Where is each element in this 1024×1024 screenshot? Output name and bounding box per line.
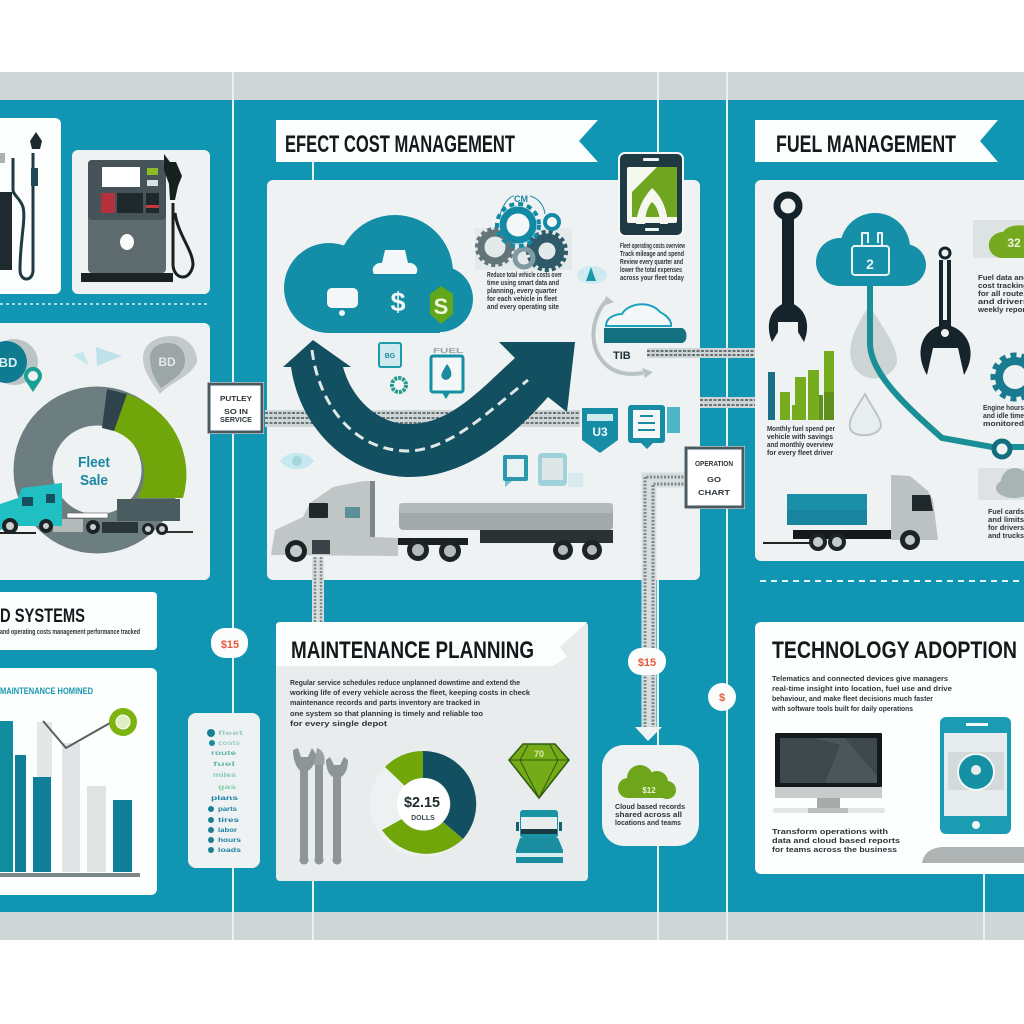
text block: tablet — [620, 243, 685, 282]
icon: tablet base — [922, 847, 1024, 863]
text block: Telematics and connected devices give managers — [772, 676, 948, 683]
text block: tablet: Review every quarter and — [620, 259, 683, 266]
icon: gears — [475, 194, 572, 270]
icon: green tag: 32 — [1007, 236, 1021, 250]
panel: systems heading: and operating costs management performance tracked — [0, 629, 140, 636]
panel: fuel pump — [72, 150, 210, 294]
panel: fleet donut — [0, 323, 210, 580]
text block: gears: and every operating site — [487, 304, 559, 311]
bar chart: and monthly overview — [767, 442, 833, 449]
panel: fuel management — [755, 180, 1024, 561]
icon: wrenches — [293, 748, 348, 865]
panel: legend column: costs — [218, 740, 240, 747]
connector: left tag — [207, 382, 264, 434]
connector: right tag with arrow — [635, 446, 745, 741]
icon: green tag — [973, 220, 1024, 258]
bar chart: Monthly fuel spend per — [767, 426, 835, 433]
connector: to fuel panel — [647, 348, 755, 408]
panel: legend column: fuel — [213, 761, 235, 768]
donut chart — [33, 389, 186, 534]
text block: right upper: and drivers — [978, 299, 1024, 306]
donut chart: DOLLS — [411, 815, 435, 822]
panel: effect cost management — [265, 153, 700, 580]
icon: small badges centre — [379, 343, 464, 399]
panel: legend column — [188, 713, 260, 868]
heading: effect cost management: EFECT COST MANAGEMENT — [285, 131, 515, 158]
icon: grey cloud tag: and limits — [988, 517, 1024, 524]
panel: legend column: labor — [218, 827, 238, 834]
icon: tablet — [619, 153, 683, 236]
text block: for every single depot — [290, 721, 388, 728]
text block: right upper — [977, 275, 1024, 314]
heading: MAINTENANCE PLANNING — [291, 637, 534, 664]
badge: connector dots — [211, 628, 736, 711]
donut chart — [370, 751, 476, 857]
teal background band — [0, 100, 1024, 912]
badge: connector dots: $15 — [638, 657, 656, 669]
text block: locations and teams — [615, 820, 681, 827]
icon: document badges — [503, 405, 680, 487]
icon: monitor — [773, 733, 885, 813]
icon: cloud with icons — [284, 215, 473, 333]
connector: left tag: SO IN — [224, 409, 248, 416]
icon: cloud: 2 — [866, 256, 874, 272]
text block: one system so that planning is timely and reliable too — [290, 711, 483, 718]
text block — [771, 676, 952, 713]
text block: right upper: Fuel data and — [978, 275, 1024, 282]
icon: eye — [280, 453, 314, 469]
donut chart: $2.15 — [404, 794, 440, 811]
icon: map pins — [0, 336, 197, 394]
icon: small badges centre: FUEL — [433, 348, 464, 355]
icon: green cloud: $12 — [642, 786, 656, 795]
panel: legend column: miles — [213, 772, 237, 779]
icon: grey cloud tag: and trucks — [988, 533, 1024, 540]
panel: legend column: plans — [211, 795, 239, 802]
panel: legend column: gas — [218, 784, 237, 791]
text block: below monitor: for teams across the business — [772, 847, 897, 854]
icon: document badges: U3 — [592, 425, 608, 439]
connector: down to maintenance — [312, 557, 324, 622]
icon: gem: 70 — [534, 749, 544, 759]
text block: Regular service schedules reduce unplanned downtime and extend the — [290, 680, 520, 687]
donut chart: Sale — [80, 472, 108, 489]
text block: right upper: cost tracking — [978, 283, 1024, 290]
icon: truck front — [516, 810, 563, 863]
panel: bar chart — [0, 668, 157, 895]
text block: below monitor: Transform operations with — [772, 829, 888, 836]
icon: drop and line — [850, 286, 1024, 457]
icon: long wrench — [769, 195, 807, 342]
icon: gear — [993, 355, 1024, 399]
text block: gears: planning, every quarter — [487, 288, 557, 295]
panel: bar chart: MAINTENANCE HOMINED — [0, 686, 93, 696]
icon: cloud with icons: S — [434, 294, 448, 319]
icon: grey cloud tag — [978, 468, 1024, 540]
icon: gem — [509, 744, 569, 798]
truck — [763, 475, 938, 551]
donut chart: Fleet — [78, 454, 110, 471]
icon: wrench right — [921, 248, 971, 375]
icon: cloud with icons: $ — [390, 287, 406, 317]
connector: left tag: SERVICE — [220, 417, 252, 424]
icon: grey cloud tag: Fuel cards — [988, 509, 1024, 516]
text block: gears: time using smart data and — [487, 280, 559, 287]
icon: grey cloud tag: for drivers — [988, 525, 1024, 532]
text block: shared across all — [615, 812, 682, 819]
text block: working life of every vehicle across the fleet, keeping costs in check — [289, 690, 530, 697]
bar chart: vehicle with savings — [767, 434, 833, 441]
badge: connector dots: $15 — [221, 639, 239, 651]
text block: with software tools built for daily operations — [771, 706, 913, 713]
text block — [289, 680, 530, 728]
bar chart — [767, 351, 835, 457]
icon: map pins: BD — [158, 355, 176, 369]
text block: real-time insight into location, fuel use and drive — [772, 686, 952, 693]
text block: behaviour, and make fleet decisions much faster — [772, 696, 933, 703]
text block — [615, 804, 685, 827]
connector: right tag with arrow: GO — [707, 477, 722, 484]
icon: small badges centre: BG — [385, 353, 396, 360]
connector: left tag: PUTLEY — [220, 396, 252, 403]
text block: right upper: for all routes — [978, 291, 1024, 298]
text block: tablet: across your fleet today — [620, 275, 684, 282]
icon: phone — [940, 717, 1011, 834]
bar chart: for every fleet driver — [767, 450, 833, 457]
text block: right middle — [983, 405, 1024, 428]
text block: below monitor — [772, 829, 900, 854]
panel: maintenance planning — [276, 622, 588, 881]
icon: drop badge — [577, 266, 607, 284]
heading: fuel management: FUEL MANAGEMENT — [776, 131, 956, 158]
heading: fuel management — [755, 120, 998, 162]
heading: effect cost management — [276, 120, 598, 162]
text block: maintenance records and parts inventory are tracked in — [290, 700, 480, 707]
text block: tablet: Track mileage and spend — [620, 251, 684, 258]
connector band behind road — [265, 410, 580, 427]
panel: pump tools — [0, 118, 61, 294]
badge: connector dots: $ — [719, 692, 725, 704]
icon: cycle cloud — [593, 296, 686, 378]
icon: cloud — [816, 213, 926, 286]
panel: systems heading — [0, 592, 157, 650]
panel: legend column: route — [211, 750, 237, 757]
text block: gears — [487, 272, 562, 311]
panel: legend column: hours — [218, 837, 241, 844]
text block: tablet: lower the total expenses — [620, 267, 682, 274]
text block: tablet: Fleet operating costs overview — [620, 243, 685, 250]
icon: truck — [0, 483, 193, 535]
icon: gears: CM — [514, 194, 528, 204]
panel: technology adoption — [755, 622, 1024, 874]
text block: gears: for each vehicle in fleet — [487, 296, 558, 303]
truck and tanker — [271, 481, 613, 562]
arrow: road curve — [283, 340, 575, 477]
text block: Cloud based records — [615, 804, 685, 811]
text block: gears: Reduce total vehicle costs over — [487, 272, 562, 279]
text block: right upper: weekly report — [977, 307, 1024, 314]
panel: legend column: loads — [218, 847, 242, 854]
text block: right middle: monitored — [983, 421, 1024, 428]
heading — [276, 622, 587, 666]
connector: right tag with arrow: OPERATION — [695, 461, 733, 468]
connector: right tag with arrow: CHART — [698, 490, 731, 497]
text block: below monitor: data and cloud based reports — [772, 838, 900, 845]
panel: legend column: fleet — [218, 730, 245, 737]
icon: cycle cloud: TIB — [613, 350, 631, 362]
panel: legend column: parts — [218, 806, 237, 813]
panel: legend column: tires — [218, 817, 240, 824]
panel: systems heading: D SYSTEMS — [0, 606, 85, 627]
panel: cloud callout — [602, 745, 699, 846]
